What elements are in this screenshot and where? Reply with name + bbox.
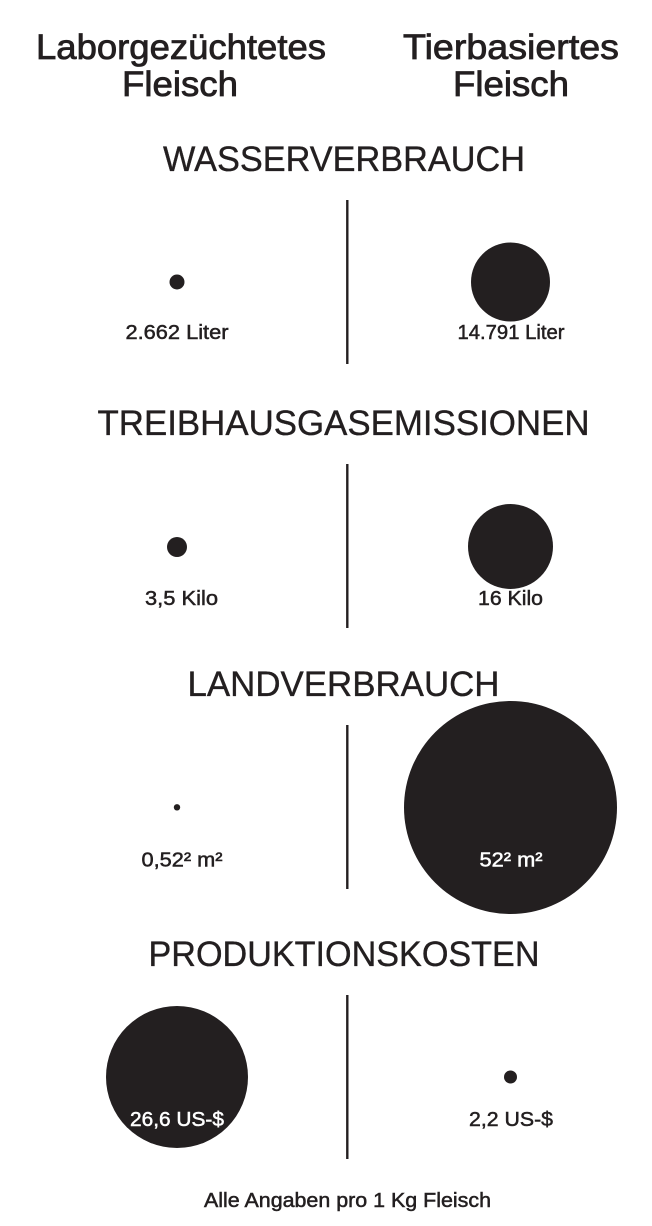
circle: lab-grown water use <box>170 274 184 290</box>
circle: animal-based land use <box>404 701 617 914</box>
column heading: animal-based meat: Fleisch <box>453 65 569 104</box>
label: lab-grown emissions: 3,5 Kilo <box>145 588 218 610</box>
label: animal-based production cost: 2,2 US-$ <box>469 1109 553 1131</box>
heading: land use: LANDVERBRAUCH <box>188 665 500 704</box>
section: greenhouse gas emissions <box>98 404 590 628</box>
circle: animal-based production cost <box>504 1070 517 1084</box>
footnote: Alle Angaben pro 1 Kg Fleisch <box>204 1190 491 1212</box>
circle: lab-grown production cost <box>106 1006 248 1148</box>
label: lab-grown land use: 0,52² m² <box>142 850 223 872</box>
circle: lab-grown emissions <box>167 537 187 557</box>
label: lab-grown production cost: 26,6 US-$ <box>130 1109 224 1131</box>
circle: animal-based emissions <box>468 504 553 589</box>
section: water use <box>126 140 565 364</box>
section: production costs <box>106 935 553 1159</box>
label: animal-based water use: 14.791 Liter <box>458 322 565 344</box>
column heading: lab-grown meat: Fleisch <box>122 65 238 104</box>
label: animal-based emissions: 16 Kilo <box>478 588 543 610</box>
section: land use <box>142 665 617 914</box>
column heading: animal-based meat <box>403 28 619 104</box>
column heading: animal-based meat: Tierbasiertes <box>403 28 619 67</box>
circle: animal-based water use <box>471 242 550 322</box>
circle: lab-grown land use <box>174 804 180 810</box>
heading: greenhouse gas emissions: TREIBHAUSGASEMISSIONEN <box>98 404 590 443</box>
label: animal-based land use: 52² m² <box>480 850 543 872</box>
column heading: lab-grown meat: Laborgezüchtetes <box>36 28 326 67</box>
heading: production costs: PRODUKTIONSKOSTEN <box>148 935 540 974</box>
label: lab-grown water use: 2.662 Liter <box>126 322 229 344</box>
heading: water use: WASSERVERBRAUCH <box>163 140 525 179</box>
column heading: lab-grown meat <box>36 28 326 104</box>
